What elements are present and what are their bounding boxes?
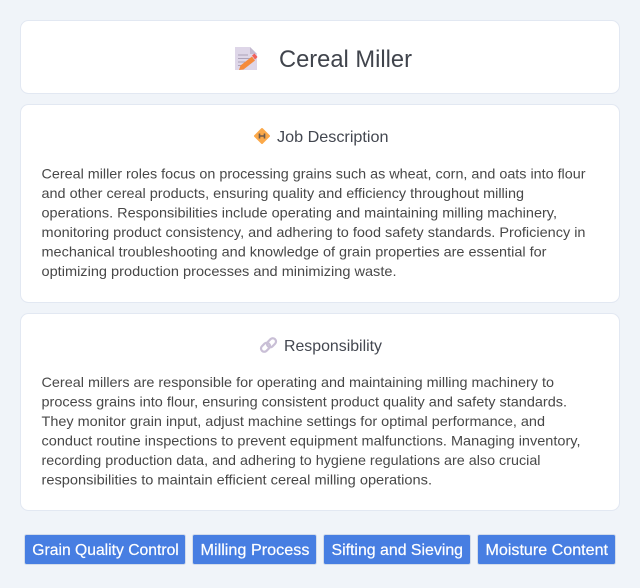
heading: responsibility: Responsibility [284,338,382,355]
tag: grain quality control: Grain Quality Control [32,542,179,559]
text block: responsibility: recording production data, and adhering to hygiene regulations are also crucial [42,452,540,468]
text block: responsibility [42,374,580,488]
text block: responsibility: responsibilities to maintain efficient cereal milling operations. [42,472,432,488]
text block: job description: operations. Responsibilities include operating and maintaining milling machinery, [42,205,557,221]
text block: responsibility: process grains into flour, ensuring consistent product quality and safety standards. [42,394,567,410]
tag: milling process: Milling Process [200,542,310,559]
tag: milling process [192,534,316,564]
panel: job description [20,104,620,302]
panel: responsibility [20,314,620,510]
tag: moisture content: Moisture Content [486,542,609,559]
text block: responsibility: They monitor grain input, adjust machine settings for optimal performance, and [42,413,545,429]
text block: responsibility: Cereal millers are responsible for operating and maintaining milling machinery to [42,374,554,390]
tag: moisture content [478,534,616,564]
tag: grain quality control [24,534,186,564]
text block: responsibility: conduct routine inspections to prevent equipment malfunctions. Managing inventory, [42,432,580,448]
tag: sifting and sieving: Sifting and Sieving [332,542,463,559]
panel: title card [20,20,620,94]
icon: chain link [260,337,277,353]
heading: job description: Job Description [277,129,388,146]
text block: job description: optimizing production processes and minimizing waste. [42,263,396,279]
icon: diamond sign [255,129,269,143]
tag: sifting and sieving [324,534,470,564]
text block: job description: monitoring product consistency, and adhering to food safety standards. Proficiency in [42,224,586,240]
icon: document with pencil [235,47,258,70]
text block: job description: and other cereal products, ensuring quality and efficiency throughout milling [42,185,524,201]
text block: job description: mechanical troubleshooting and knowledge of grain properties are essential for [42,244,547,260]
text block: job description [42,166,586,279]
text block: job description: Cereal miller roles focus on processing grains such as wheat, corn, and oats into flour [42,166,586,182]
title text: Cereal Miller [279,46,412,73]
